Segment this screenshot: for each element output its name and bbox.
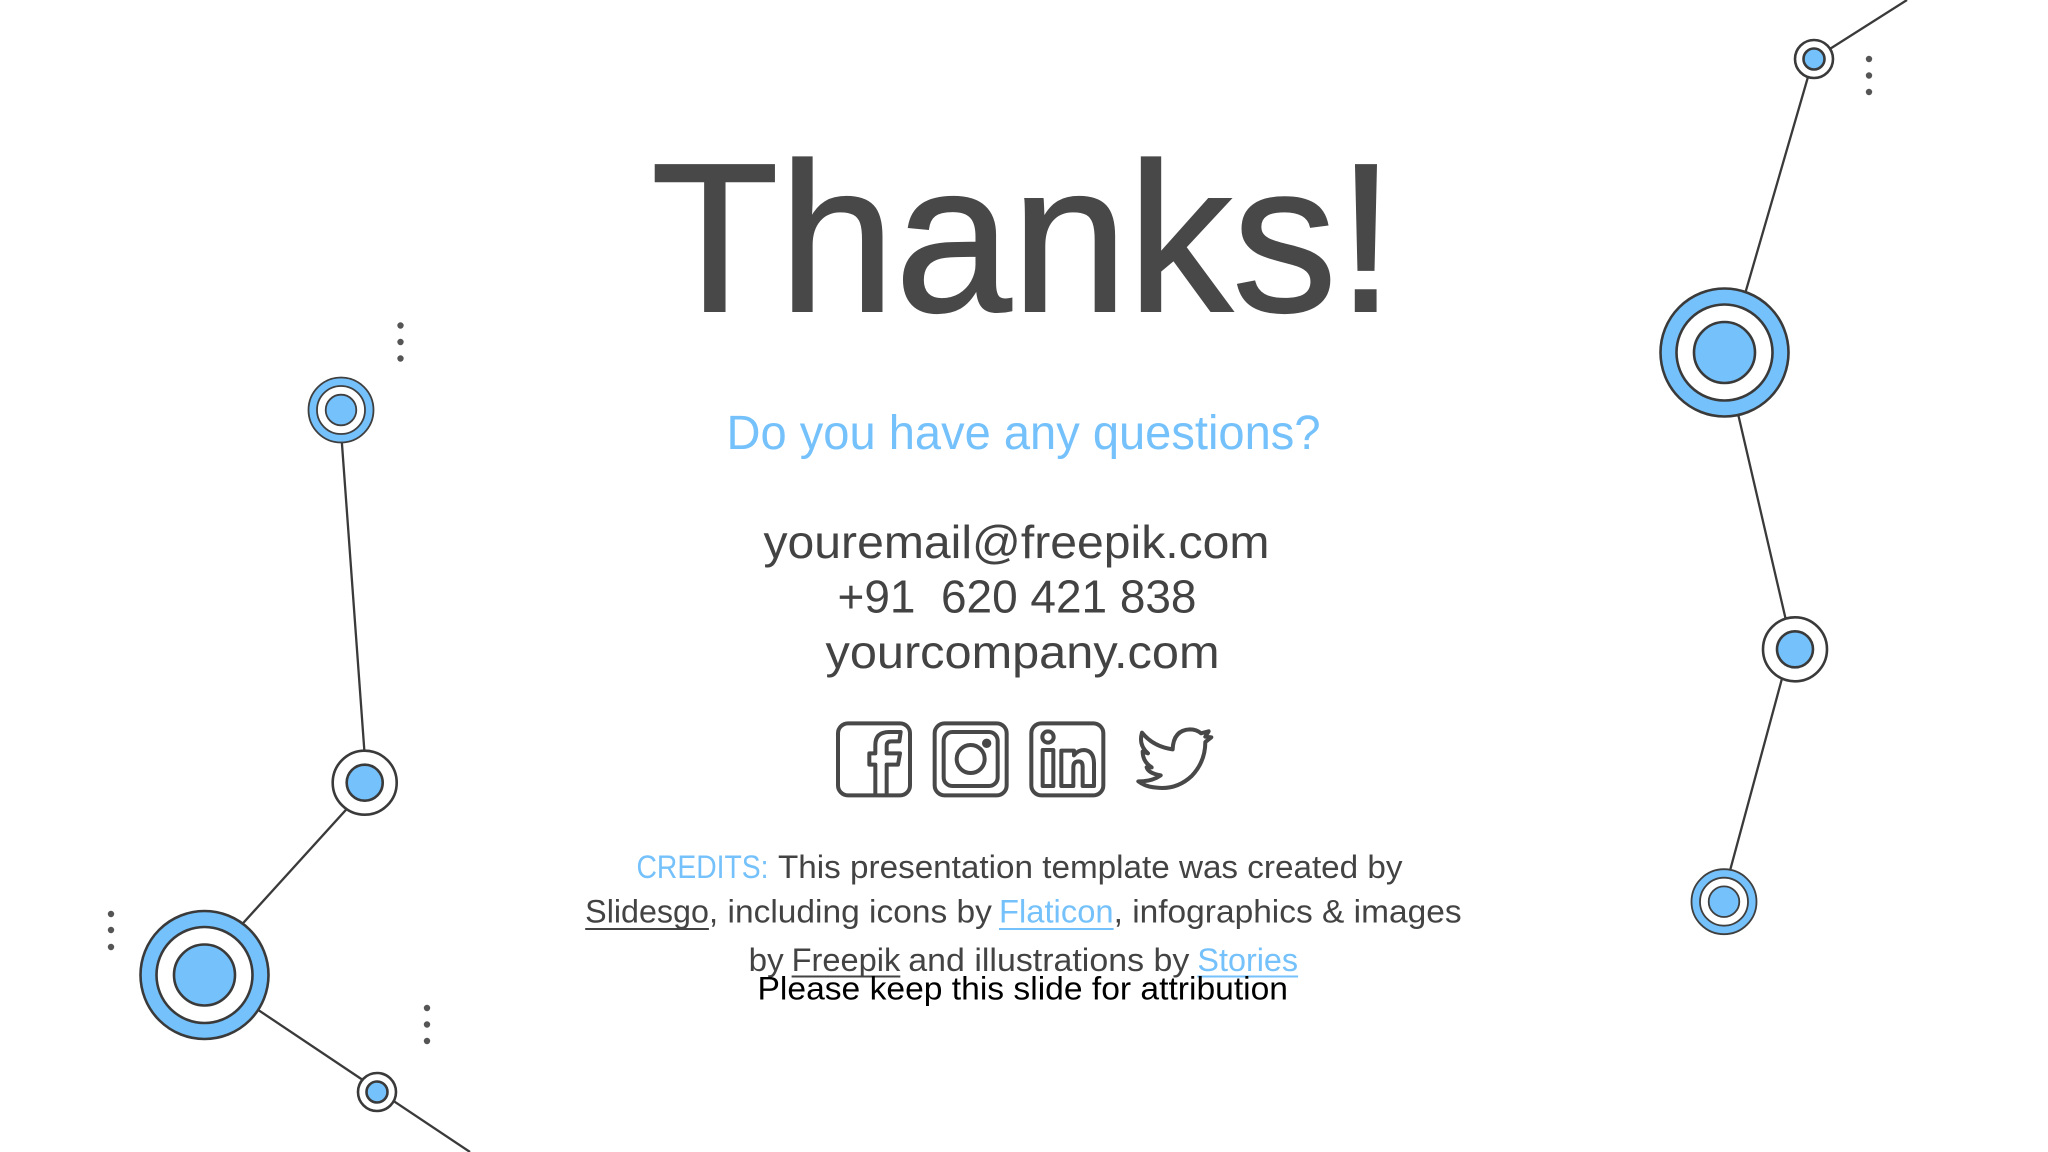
right node: bottom ring (1692, 869, 1756, 934)
icon: instagram (935, 723, 1007, 795)
left node: small bottom (358, 1073, 396, 1111)
right node: small top (1795, 40, 1833, 78)
email: youremail@freepik.com (764, 516, 1270, 568)
credits line 3 (749, 942, 1298, 978)
right node: middle (1763, 617, 1827, 681)
icon: linkedin (1031, 723, 1103, 795)
phone: +91 620 421 838 (838, 570, 1196, 622)
attribution note: Please keep this slide for attribution (758, 970, 1288, 1006)
right node: large (1660, 288, 1788, 416)
website: yourcompany.com (826, 626, 1220, 678)
icon: facebook (838, 723, 910, 795)
left connecting lines (196, 410, 470, 1152)
left node: top ring (308, 378, 374, 442)
dots: upper right (1866, 56, 1872, 95)
credits line 1: CREDITS: (636, 849, 768, 885)
contact details (764, 516, 1270, 678)
credits line 2: , infographics & images (1114, 894, 1462, 930)
social icons (838, 723, 1211, 795)
dots: bottom (424, 1005, 430, 1044)
credits text (585, 849, 1462, 978)
title: Thanks! (651, 119, 1395, 356)
dots: lower left (108, 911, 114, 950)
left node: large (140, 911, 268, 1039)
subtitle question: Do you have any questions? (726, 407, 1320, 460)
credits line 2 (585, 894, 1462, 930)
credits line 3: Freepik (792, 942, 901, 978)
icon: twitter (1138, 729, 1211, 788)
right connecting lines (1722, 0, 1907, 902)
credits line 1: This presentation template was created by (778, 849, 1402, 885)
credits line 2: , including icons by (709, 894, 992, 930)
credits line 2: Flaticon (999, 894, 1114, 930)
dots: upper left (397, 322, 404, 362)
left network graphic (108, 322, 470, 1152)
credits line 2: Slidesgo (585, 894, 709, 930)
credits line 3: and illustrations by (908, 942, 1189, 978)
credits line 3: Stories (1197, 942, 1298, 978)
left node: middle (333, 751, 397, 815)
right network graphic (1660, 0, 1907, 934)
credits line 3: by (749, 942, 784, 978)
